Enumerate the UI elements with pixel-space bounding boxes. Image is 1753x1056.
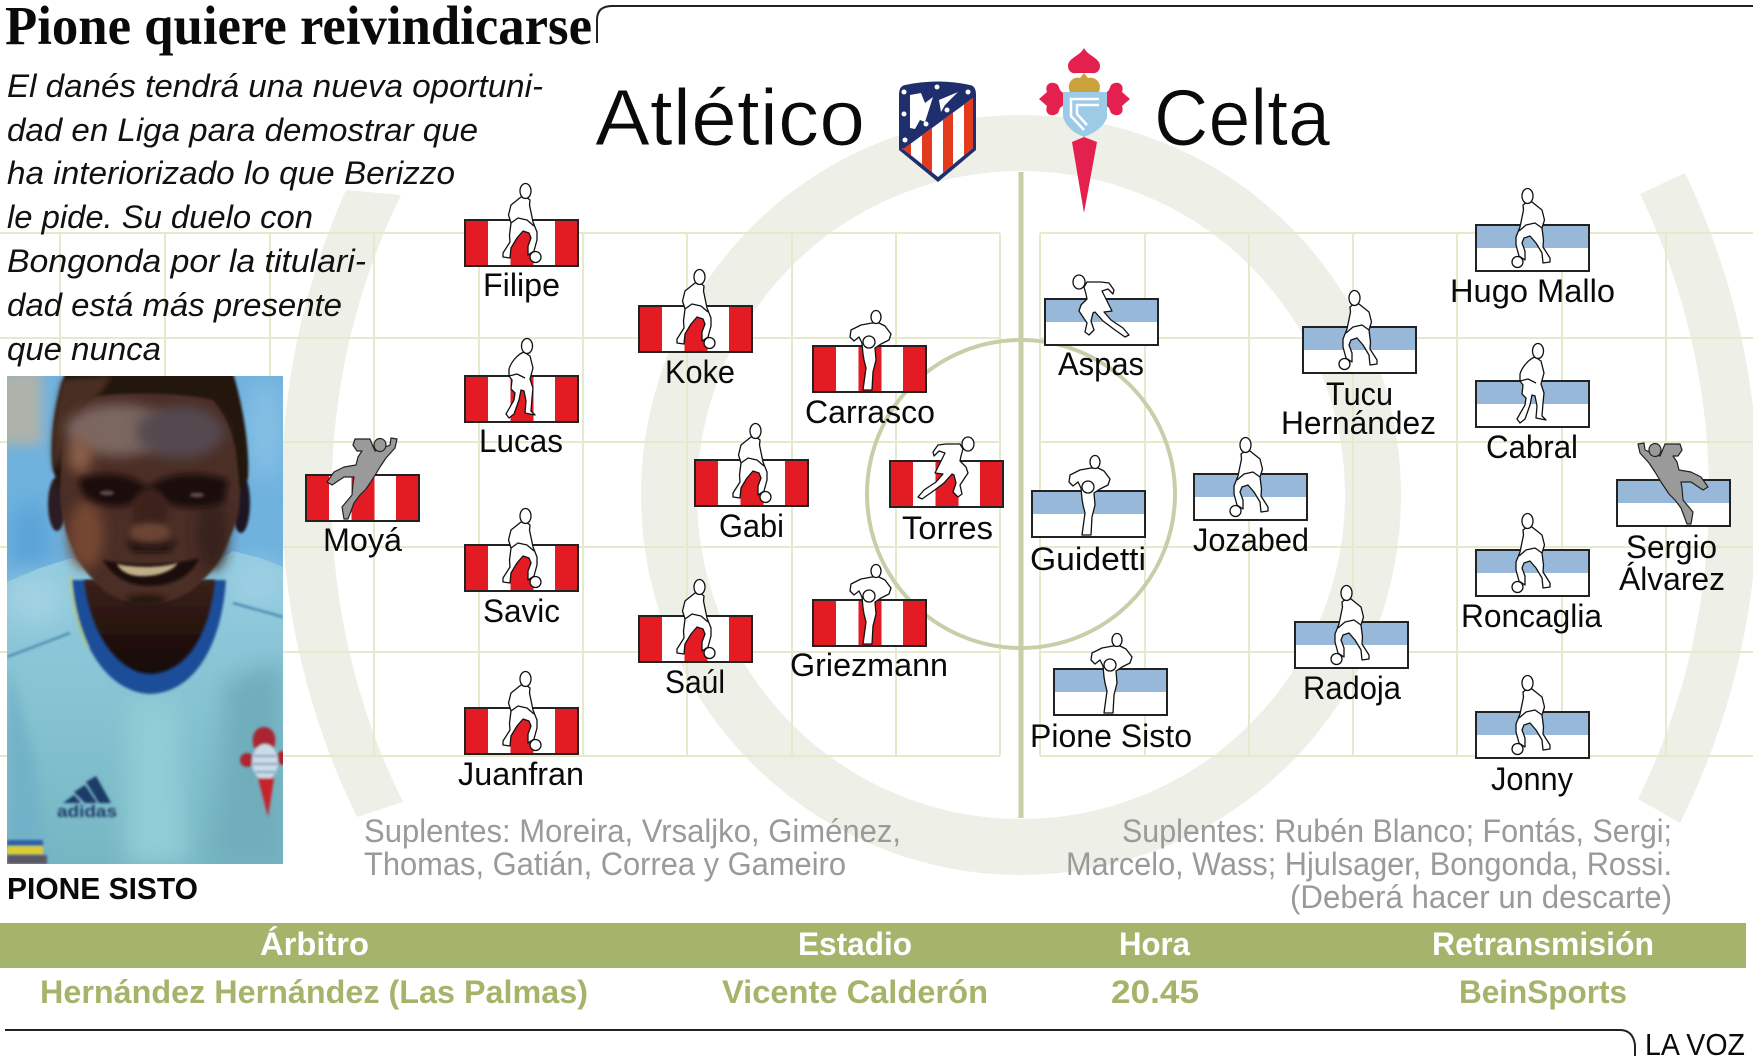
player: Savic: Savic: [483, 593, 560, 629]
photo caption: PIONE SISTO: [7, 871, 198, 906]
intro text: ha interiorizado lo que Berizzo: [7, 155, 455, 191]
pitch background: concentric arcs: [281, 143, 1753, 847]
match info values: Vicente Calderón: [722, 974, 988, 1010]
player: Guidetti: [1030, 456, 1146, 577]
adidas logo: adidas: [57, 802, 117, 821]
player: Tucu Hernández: [1281, 290, 1436, 441]
intro text: que nunca: [7, 331, 161, 367]
player: Jonny: [1476, 676, 1589, 797]
player: Hugo Mallo: Hugo Mallo: [1450, 273, 1615, 309]
nose: [132, 488, 168, 524]
intro text: dad está más presente: [7, 287, 342, 323]
player: Hugo Mallo: [1450, 188, 1615, 309]
mouth: [103, 558, 199, 586]
player: Koke: Koke: [665, 354, 735, 390]
player: Jonny: Jonny: [1491, 761, 1573, 797]
player: Carrasco: [805, 310, 935, 430]
substitutes: Atlético: [364, 813, 901, 882]
face: [60, 394, 240, 604]
player: Koke: [639, 270, 752, 390]
player: Roncaglia: [1461, 514, 1602, 634]
team name: Celta: Celta: [1154, 73, 1330, 162]
player: Radoja: Radoja: [1303, 670, 1401, 706]
intro text: dad en Liga para demostrar que: [7, 112, 478, 148]
player: Saúl: Saúl: [665, 664, 725, 700]
match info header band: Hora: [1119, 926, 1190, 962]
player: Juanfran: [458, 672, 584, 792]
player: Torres: [890, 437, 1003, 546]
crest: Atlético: [899, 82, 976, 182]
player: Sergio Álvarez: Sergio: [1626, 529, 1717, 565]
player: Griezmann: Griezmann: [790, 647, 948, 683]
match info values: [40, 974, 1627, 1010]
player: Griezmann: [790, 564, 948, 683]
player: Sergio Álvarez: Álvarez: [1619, 561, 1725, 597]
player: Guidetti: Guidetti: [1030, 541, 1146, 577]
match info header band: Retransmisión: [1432, 926, 1654, 962]
player: Jozabed: [1193, 438, 1309, 558]
player: Torres: Torres: [902, 510, 993, 546]
match info values: BeinSports: [1459, 974, 1627, 1010]
hair: [52, 370, 248, 490]
substitutes: Celta: [1066, 813, 1672, 915]
player: Gabi: [695, 424, 808, 544]
intro text: le pide. Su duelo con: [7, 199, 313, 235]
player: Pione Sisto: [1030, 634, 1192, 754]
match info values: Hernández Hernández (Las Palmas): [40, 974, 588, 1010]
player: Moyá: Moyá: [323, 522, 402, 558]
player: Tucu Hernández: Hernández: [1281, 405, 1436, 441]
match info header band: Árbitro: [260, 926, 369, 962]
match info values: 20.45: [1111, 974, 1199, 1010]
player: Saúl: [639, 580, 752, 700]
player: Cabral: [1476, 344, 1589, 465]
player: Sergio Álvarez: [1617, 443, 1730, 597]
match info header band: [0, 923, 1746, 968]
brows and eyes: [78, 474, 228, 508]
player: Roncaglia: Roncaglia: [1461, 598, 1602, 634]
player: Filipe: Filipe: [483, 267, 560, 303]
substitutes: Celta: (Deberá hacer un descarte): [1290, 879, 1672, 915]
substitutes: Atlético: Suplentes: Moreira, Vrsaljko, Giménez,: [364, 813, 901, 849]
player: Cabral: Cabral: [1486, 429, 1578, 465]
pitch centre circle and halfway line: [867, 172, 1175, 818]
player: Savic: [465, 508, 578, 629]
player: Lucas: Lucas: [479, 423, 563, 459]
intro text: Bongonda por la titulari-: [7, 243, 366, 279]
crest on shirt: [240, 727, 290, 817]
adidas logo: [57, 776, 117, 821]
player: Filipe: [465, 184, 578, 303]
player: Tucu Hernández: Tucu: [1326, 376, 1393, 412]
crest: Celta: [1039, 48, 1130, 213]
substitutes: Atlético: Thomas, Gatián, Correa y Gameiro: [364, 846, 846, 882]
player: Aspas: Aspas: [1058, 346, 1144, 382]
match info header band: Estadio: [798, 926, 912, 962]
player: Lucas: [465, 338, 578, 459]
ears: [48, 477, 66, 531]
jersey: [7, 551, 283, 864]
collar and neck: [72, 580, 226, 694]
player: Radoja: [1295, 586, 1408, 706]
intro text: El danés tendrá una nueva oportuni-: [7, 68, 543, 104]
player: Juanfran: Juanfran: [458, 756, 584, 792]
substitutes: Celta: Suplentes: Rubén Blanco; Fontás, Sergi;: [1122, 813, 1672, 849]
player: Moyá: [306, 438, 419, 558]
substitutes: Celta: Marcelo, Wass; Hjulsager, Bongonda, Rossi.: [1066, 846, 1672, 882]
player: Pione Sisto: Pione Sisto: [1030, 718, 1192, 754]
team name: Atlético: Atlético: [595, 73, 865, 162]
player: Gabi: Gabi: [719, 508, 784, 544]
pitch grid: [0, 233, 1753, 756]
intro text: [7, 68, 543, 367]
player: Aspas: [1045, 275, 1158, 382]
sleeve bands: [7, 840, 43, 846]
player: Carrasco: Carrasco: [805, 394, 935, 430]
photo: Pione Sisto: [0, 370, 290, 864]
player: Jozabed: Jozabed: [1193, 522, 1309, 558]
